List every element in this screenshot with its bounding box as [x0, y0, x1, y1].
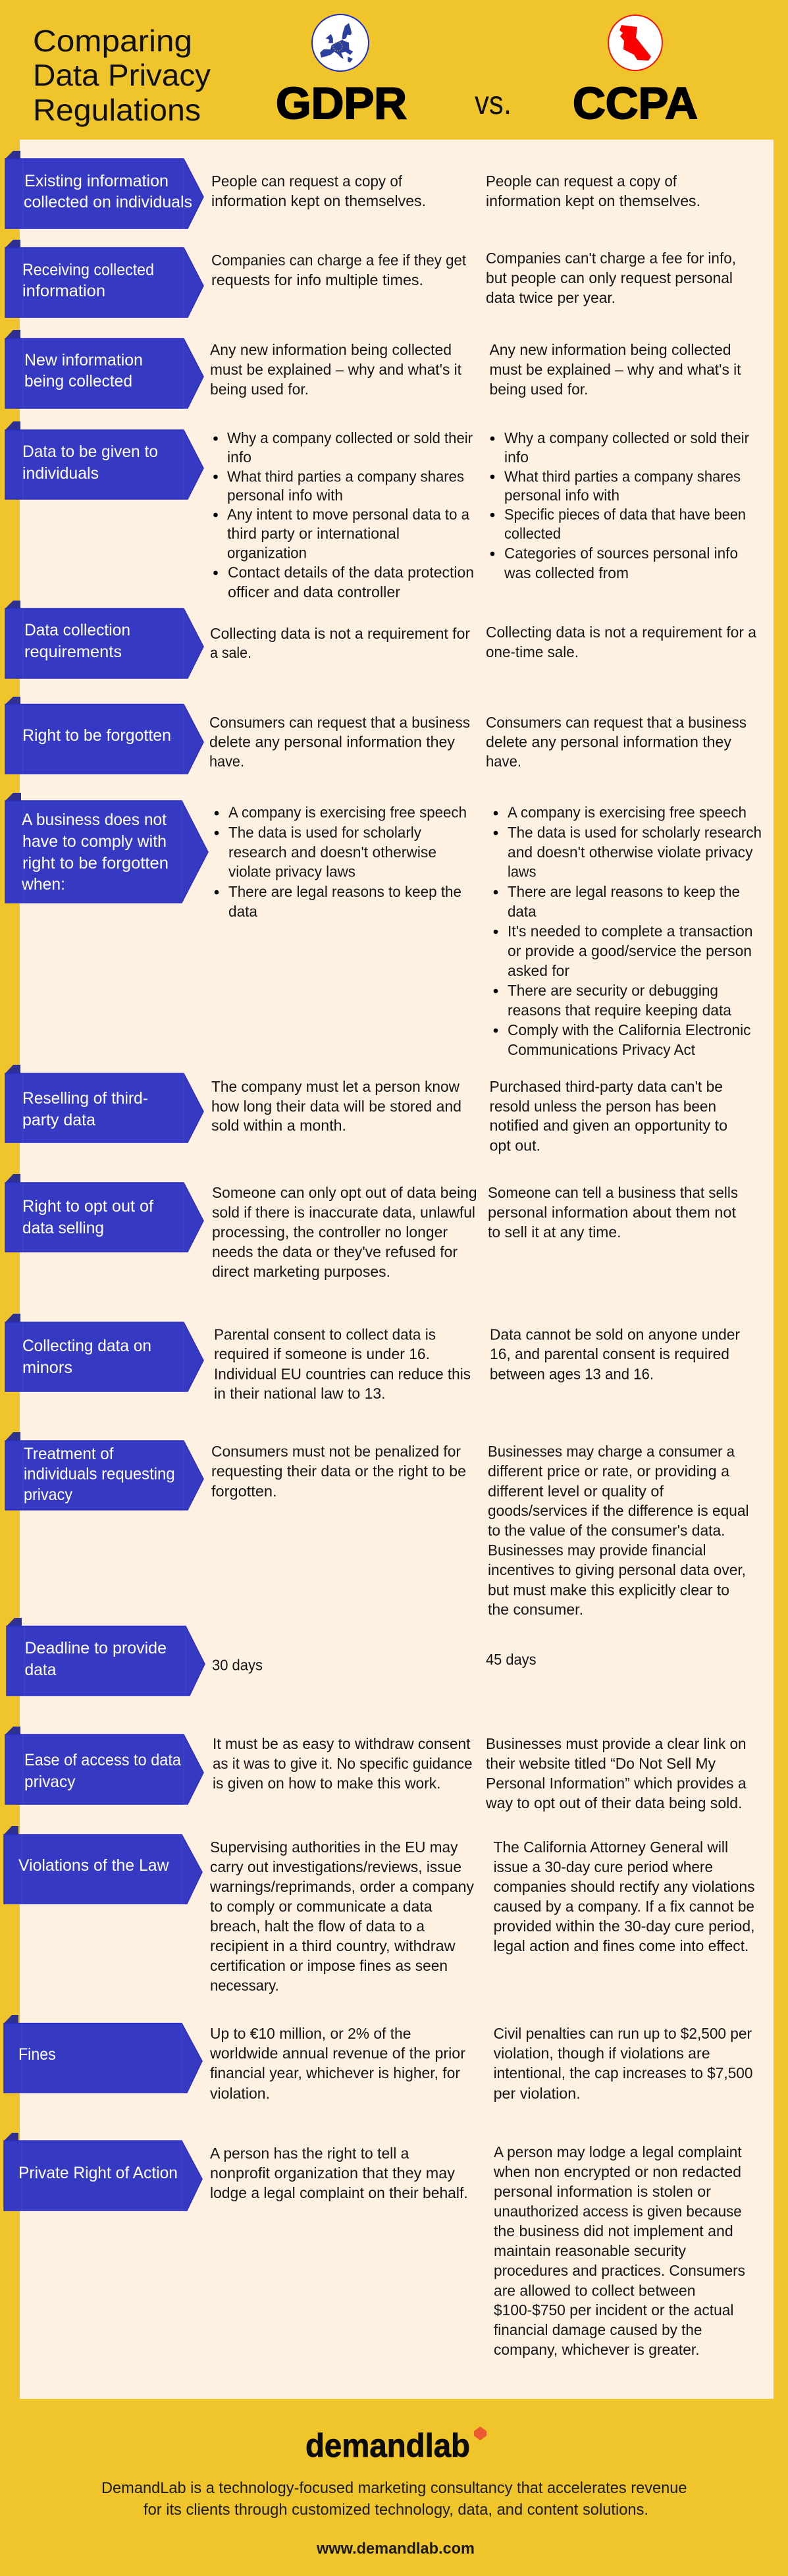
text: CCPA receiving info: but people can only request personal: [486, 269, 733, 286]
text: GDPR violations: recipient in a third country, withdraw: [210, 1937, 456, 1954]
text: GDPR data collection: a sale.: [210, 644, 251, 661]
label: Fines: [4, 2015, 202, 2093]
text: CCPA reselling: notified and given an opportunity to: [490, 1117, 727, 1134]
text: CCPA treatment: to the value of the consumer's data.: [488, 1522, 725, 1539]
label: Collecting data on minors: Collecting data on: [22, 1337, 151, 1355]
text: GDPR violations: to comply or communicate a data: [210, 1898, 433, 1915]
list: CCPA data to be given: info: [504, 448, 529, 466]
text: GDPR new information: being used for.: [210, 381, 309, 398]
label: Right to opt out of data selling: Right to opt out of: [22, 1197, 153, 1216]
text: GDPR violations: warnings/reprimands, order a company: [209, 1878, 474, 1895]
text: GDPR reselling: [211, 1078, 461, 1134]
text: CCPA private right of action: when non encrypted or non redacted: [493, 2163, 741, 2180]
text: GDPR minors: Individual EU countries can reduce this: [214, 1366, 471, 1383]
text: GDPR treatment: forgotten.: [211, 1483, 277, 1500]
label: Treatment of individuals requesting privacy: Treatment of: [24, 1445, 114, 1463]
label: Reselling of third-party data: Reselling of third-: [22, 1089, 148, 1108]
text: GDPR fines: Up to €10 million, or 2% of the: [210, 2025, 411, 2042]
label: Reselling of third-party data: [5, 1065, 203, 1142]
row: Collecting data on minors: [5, 1314, 740, 1402]
list: GDPR exceptions: data: [228, 903, 257, 920]
text: CCPA treatment: Businesses may provide financial: [488, 1542, 706, 1559]
text: vs.: vs.: [475, 84, 512, 121]
row: Exceptions to right to be forgotten: [5, 793, 762, 1058]
text: GDPR fines: financial year, whichever is higher, for: [210, 2064, 460, 2081]
list: CCPA exceptions: The data is used for scholarly research: [508, 824, 762, 841]
text: GDPR violations: Supervising authorities in the EU may: [210, 1838, 458, 1856]
list: GDPR exceptions: The data is used for scholarly: [228, 824, 421, 841]
text: GDPR treatment: [211, 1443, 466, 1500]
text: CCPA violations: legal action and fines come into effect.: [494, 1937, 749, 1954]
title: Data Privacy: [33, 58, 211, 92]
text: GDPR deadline: 30 days: [212, 1657, 263, 1674]
text: CCPA fines: violation, though if violations are: [494, 2045, 710, 2062]
text: CCPA private right of action: financial damage caused by the: [494, 2321, 702, 2338]
text: CCPA right to be forgotten: Consumers can request that a business: [486, 714, 747, 731]
row: Right to opt out of data selling: [5, 1174, 738, 1280]
title: Comparing: [33, 24, 192, 58]
text: CCPA private right of action: procedures and practices. Consumers: [494, 2262, 745, 2279]
label: Right to be forgotten: Right to be forgotten: [22, 726, 171, 745]
text: CCPA receiving info: [486, 250, 736, 306]
label: New information being collected: New information: [24, 351, 143, 369]
label: Deadline to provide data: Deadline to provide: [25, 1639, 167, 1657]
list: GDPR data to be given: What third parties a company shares: [227, 468, 464, 485]
text: CCPA ease of access: their website titled “Do Not Sell My: [486, 1755, 716, 1772]
label: Right to be forgotten: [5, 697, 203, 774]
label: New information being collected: [5, 330, 203, 408]
label: New information being collected: being collected: [24, 372, 132, 390]
text: CCPA minors: between ages 13 and 16.: [490, 1366, 654, 1383]
text: CCPA fines: per violation.: [494, 2085, 581, 2102]
text: CCPA ease of access: Personal Information” which provides a: [486, 1775, 747, 1792]
list: CCPA data to be given: What third parties a company shares: [504, 468, 741, 485]
text: CCPA treatment: Businesses may charge a consumer a: [488, 1443, 735, 1460]
text: GDPR right to be forgotten: Consumers can request that a business: [209, 714, 470, 731]
list: CCPA exceptions: and doesn't otherwise violate privacy: [508, 844, 753, 861]
list: GDPR data to be given: info: [227, 448, 251, 466]
row: Reselling of third-party data: [5, 1065, 727, 1154]
text: GDPR data collection: Collecting data is not a requirement for: [210, 625, 470, 642]
list: CCPA data to be given: Categories of sources personal info: [504, 545, 738, 562]
text: CCPA existing information: [486, 173, 700, 209]
label: Receiving collected information: Receiving collected: [22, 261, 154, 279]
text: CCPA private right of action: $100-$750 per incident or the actual: [494, 2301, 733, 2319]
label: Private Right of Action: [4, 2133, 202, 2211]
text: CCPA private right of action: company, whichever is greater.: [494, 2341, 700, 2358]
row: Violations of the Law: [4, 1826, 755, 1994]
label: Data to be given to individuals: Data to be given to: [22, 443, 158, 461]
text: CCPA private right of action: the business did not implement and: [494, 2222, 733, 2240]
text: GDPR minors: Parental consent to collect data is: [214, 1326, 436, 1343]
text: CCPA violations: [494, 1838, 755, 1954]
label: Private Right of Action: Private Right of Action: [18, 2164, 178, 2182]
text: CCPA opt out: [488, 1184, 738, 1241]
label: A business does not have to comply: right to be forgotten: [22, 854, 169, 872]
label: Receiving collected information: [5, 240, 203, 317]
text: CCPA right to be forgotten: have.: [486, 753, 521, 770]
text: CCPA treatment: goods/services if the difference is equal: [488, 1502, 749, 1519]
text: GDPR reselling: how long their data will be stored and: [211, 1098, 461, 1115]
text: GDPR new information: must be explained – why and what's it: [210, 361, 462, 378]
text: CCPA right to be forgotten: delete any personal information they: [486, 734, 731, 751]
label: Deadline to provide data: [7, 1618, 205, 1696]
list: CCPA data to be given: collected: [504, 525, 561, 542]
text: GDPR right to be forgotten: have.: [209, 753, 244, 770]
label: Deadline to provide data: data: [25, 1661, 57, 1679]
text: GDPR treatment: Consumers must not be penalized for: [211, 1443, 461, 1460]
text: CCPA new information: being used for.: [490, 381, 589, 398]
text: CCPA treatment: different level or quality of: [488, 1483, 664, 1500]
text: GDPR fines: violation.: [210, 2085, 270, 2102]
text: CCPA new information: Any new information being collected: [490, 341, 731, 358]
text: GDPR reselling: The company must let a person know: [211, 1078, 460, 1095]
text: CCPA private right of action: A person may lodge a legal complaint: [494, 2143, 742, 2160]
icon: EU map in circle: [312, 14, 369, 71]
text: CCPA opt out: Someone can tell a business that sells: [488, 1184, 738, 1201]
list: CCPA exceptions: Comply with the California Electronic: [508, 1021, 750, 1038]
text: GDPR fines: [209, 2025, 465, 2102]
text: GDPR minors: [214, 1326, 471, 1402]
list: GDPR data to be given: officer and data controller: [228, 583, 400, 601]
text: CCPA opt out: to sell it at any time.: [488, 1223, 621, 1241]
text: CCPA private right of action: unauthorized access is given because: [494, 2203, 742, 2220]
row: Deadline to provide data: [7, 1618, 536, 1696]
list: GDPR data to be given: Why a company collected or sold their: [227, 429, 473, 446]
label: Existing information: Existing information: [24, 172, 169, 190]
list: CCPA exceptions: data: [508, 903, 537, 920]
text: GDPR minors: in their national law to 13.: [214, 1385, 386, 1402]
text: GDPR existing information: [211, 173, 426, 209]
row: New information being collected: [5, 330, 741, 408]
text: GDPR receiving info: Companies can charge a fee if they get: [211, 252, 467, 269]
text: GDPR violations: carry out investigations/reviews, issue: [210, 1858, 461, 1875]
text: GDPR right to be forgotten: delete any personal information they: [209, 734, 455, 751]
list: CCPA exceptions: laws: [508, 863, 536, 880]
text: CCPA treatment: but must make this explicitly clear to: [488, 1582, 729, 1599]
text: CCPA new information: [490, 341, 741, 398]
text: GDPR receiving info: requests for info multiple times.: [211, 271, 423, 288]
list: GDPR data to be given: Contact details of the data protection: [228, 564, 474, 581]
list: CCPA exceptions: It's needed to complete a transaction: [508, 923, 753, 940]
text: GDPR existing information: People can request a copy of: [211, 173, 403, 190]
label: Treatment of individuals requesting privacy: privacy: [24, 1486, 72, 1504]
label: Violations of the Law: Violations of the Law: [18, 1856, 169, 1875]
text: CCPA private right of action: are allowed to collect between: [494, 2282, 695, 2299]
text: CCPA fines: intentional, the cap increases to $7,500: [494, 2064, 753, 2081]
text: CCPA violations: The California Attorney General will: [494, 1838, 728, 1856]
text: GDPR private right of action: A person has the right to tell a: [210, 2145, 409, 2162]
list: CCPA exceptions: Communications Privacy Act: [508, 1041, 696, 1058]
text: CCPA deadline: 45 days: [486, 1651, 536, 1668]
list: CCPA data to be given: [490, 429, 749, 581]
list: CCPA exceptions: A company is exercising free speech: [508, 804, 747, 821]
text: CCPA new information: must be explained – why and what's it: [490, 361, 741, 378]
text: GDPR new information: Any new information being collected: [210, 341, 452, 358]
label: Data collection requirements: requirements: [24, 643, 122, 661]
text: CCPA existing information: People can request a copy of: [486, 173, 677, 190]
list: GDPR data to be given: personal info with: [227, 487, 343, 504]
text: CCPA right to be forgotten: [486, 714, 747, 770]
text: GDPR treatment: requesting their data or the right to be: [211, 1462, 466, 1480]
list: GDPR exceptions: A company is exercising free speech: [228, 804, 467, 821]
text: GDPR data collection: [210, 625, 470, 661]
text: CCPA treatment: [488, 1443, 749, 1618]
row: Data to be given to individuals: [5, 421, 749, 601]
text: CCPA minors: Data cannot be sold on anyone under: [490, 1326, 740, 1343]
row: Fines: [4, 2015, 753, 2102]
text: CCPA data collection: [486, 624, 756, 660]
text: CCPA minors: [490, 1326, 740, 1383]
text: GDPR ease of access: is given on how to make this work.: [213, 1775, 441, 1792]
text: GDPR opt out: [212, 1184, 477, 1280]
text: CCPA violations: companies should rectify any violations: [494, 1878, 755, 1895]
text: CCPA ease of access: Businesses must provide a clear link on: [486, 1735, 747, 1752]
list: CCPA data to be given: was collected from: [504, 564, 629, 581]
text: CCPA ease of access: [485, 1735, 747, 1811]
list: CCPA data to be given: personal info with: [504, 487, 619, 504]
list: CCPA exceptions: or provide a good/service the person: [508, 942, 752, 959]
list: GDPR data to be given: third party or international: [227, 525, 400, 542]
list: CCPA exceptions: reasons that require keeping data: [508, 1002, 731, 1019]
label: A business does not have to comply: have to comply with: [22, 832, 167, 851]
text: CCPA receiving info: data twice per year.: [486, 289, 616, 306]
text: CCPA violations: provided within the 30-day cure period,: [494, 1918, 755, 1935]
text: GDPR reselling: sold within a month.: [211, 1117, 346, 1134]
text: GDPR opt out: processing, the controller no longer: [212, 1223, 448, 1241]
text: CCPA opt out: personal information about them not: [488, 1204, 737, 1221]
text: CCPA private right of action: personal information is stolen or: [494, 2183, 711, 2200]
label: Treatment of individuals requesting privacy: [5, 1432, 203, 1510]
text: GDPR right to be forgotten: [209, 714, 470, 770]
label: Right to opt out of data selling: data selling: [22, 1219, 104, 1237]
label: Data to be given to individuals: [5, 421, 203, 499]
label: Collecting data on minors: [5, 1314, 203, 1391]
label: Ease of access to data privacy: privacy: [24, 1773, 76, 1791]
heading: CCPA: CCPA: [573, 78, 698, 128]
text: GDPR opt out: sold if there is inaccurate data, unlawful: [212, 1204, 475, 1221]
list: GDPR exceptions: research and doesn't otherwise: [228, 844, 436, 861]
label: Reselling of third-party data: party data: [22, 1111, 95, 1129]
text: GDPR ease of access: It must be as easy to withdraw consent: [213, 1735, 471, 1752]
label: Right to opt out of data selling: [5, 1174, 203, 1252]
text: CCPA data collection: one-time sale.: [486, 643, 579, 660]
list: GDPR data to be given: organization: [227, 544, 307, 561]
text: CCPA treatment: incentives to giving personal data over,: [488, 1561, 746, 1578]
text: CCPA treatment: the consumer.: [488, 1601, 583, 1618]
label: Ease of access to data privacy: [5, 1727, 203, 1804]
label: Ease of access to data privacy: Ease of access to data: [24, 1751, 181, 1769]
label: Collecting data on minors: minors: [22, 1358, 72, 1377]
label: A business does not have to comply: [5, 793, 208, 903]
row: Treatment of individuals requesting privacy: [5, 1432, 749, 1618]
heading: GDPR: GDPR: [276, 78, 407, 128]
text: GDPR fines: worldwide annual revenue of the prior: [209, 2045, 465, 2062]
list: GDPR exceptions: There are legal reasons to keep the: [228, 883, 461, 900]
text: CCPA fines: Civil penalties can run up to $2,500 per: [494, 2025, 752, 2042]
text: CCPA violations: issue a 30-day cure period where: [494, 1858, 713, 1875]
text: CCPA data collection: Collecting data is not a requirement for a: [486, 624, 756, 641]
list: GDPR data to be given: Any intent to move personal data to a: [227, 506, 469, 523]
icon: California map in circle: [608, 15, 662, 70]
label: A business does not have to comply: A business does not: [22, 811, 167, 829]
label: Existing information: [5, 151, 203, 228]
text: GDPR new information: [210, 341, 462, 398]
label: Data to be given to individuals: individuals: [22, 464, 99, 483]
text: GDPR violations: certification or impose fines as seen: [210, 1957, 448, 1974]
text: GDPR private right of action: [210, 2145, 468, 2201]
text: company description: for its clients through customized technology, data, and content solutions.: [144, 2501, 648, 2519]
text: CCPA ease of access: way to opt out of their data being sold.: [485, 1794, 743, 1811]
text: GDPR opt out: Someone can only opt out of data being: [212, 1184, 477, 1201]
text: website: www.demandlab.com: [316, 2540, 475, 2558]
label: Receiving collected information: information: [22, 282, 105, 300]
label: Violations of the Law: [4, 1826, 202, 1904]
row: Private Right of Action: [4, 2133, 745, 2358]
list: CCPA data to be given: Why a company collected or sold their: [504, 429, 749, 446]
text: GDPR ease of access: as it was to give it. No specific guidance: [213, 1755, 473, 1772]
text: GDPR violations: necessary.: [210, 1977, 279, 1994]
text: GDPR violations: breach, halt the flow of data to a: [210, 1918, 425, 1935]
label: Data collection requirements: [5, 601, 203, 678]
text: CCPA private right of action: maintain reasonable security: [494, 2242, 686, 2259]
text: CCPA receiving info: Companies can't charge a fee for info,: [486, 250, 736, 267]
text: CCPA minors: 16, and parental consent is required: [490, 1345, 729, 1362]
list: GDPR exceptions: violate privacy laws: [228, 863, 355, 880]
text: GDPR violations: [209, 1838, 474, 1994]
label: Fines: Fines: [18, 2045, 56, 2064]
text: GDPR receiving info: [211, 252, 467, 288]
list: GDPR exceptions: [215, 804, 467, 920]
title: Regulations: [33, 93, 201, 127]
row: Ease of access to data privacy: [5, 1727, 747, 1811]
text: GDPR existing information: information kept on themselves.: [211, 192, 426, 209]
text: company description: DemandLab is a technology-focused marketing consultancy that accelerates revenue: [101, 2479, 687, 2497]
label: Data collection requirements: Data collection: [24, 621, 130, 639]
text: GDPR minors: required if someone is under 16.: [214, 1345, 430, 1362]
text: CCPA reselling: [490, 1078, 727, 1154]
text: CCPA fines: [494, 2025, 753, 2102]
text: CCPA reselling: Purchased third-party data can't be: [490, 1078, 723, 1095]
text: CCPA treatment: different price or rate, or providing a: [488, 1462, 729, 1480]
text: CCPA private right of action: [493, 2143, 745, 2358]
label: A business does not have to comply: when:: [21, 875, 65, 894]
text: company description: [101, 2479, 687, 2519]
row: Existing information: [5, 151, 700, 228]
logo: demandlab: demandlab: [305, 2427, 470, 2464]
label: Existing information: collected on individuals: [24, 193, 192, 211]
row: Data collection requirements: [5, 601, 756, 678]
title: [33, 24, 211, 127]
text: GDPR ease of access: [213, 1735, 473, 1792]
row: Right to be forgotten: [5, 697, 747, 774]
text: GDPR opt out: needs the data or they've refused for: [212, 1243, 458, 1260]
list: CCPA exceptions: asked for: [508, 962, 569, 979]
list: CCPA data to be given: Specific pieces of data that have been: [504, 506, 746, 523]
list: CCPA exceptions: There are legal reasons to keep the: [508, 883, 740, 900]
text: CCPA violations: caused by a company. If a fix cannot be: [494, 1898, 754, 1915]
list: CCPA exceptions: There are security or debugging: [508, 982, 718, 999]
text: GDPR opt out: direct marketing purposes.: [212, 1263, 390, 1280]
text: CCPA reselling: opt out.: [490, 1137, 540, 1154]
text: CCPA existing information: information kept on themselves.: [486, 192, 700, 209]
list: CCPA exceptions: [494, 804, 762, 1058]
label: Treatment of individuals requesting privacy: individuals requesting: [24, 1464, 175, 1483]
text: GDPR private right of action: nonprofit organization that they may: [210, 2164, 456, 2182]
row: Receiving collected information: [5, 240, 736, 317]
text: CCPA reselling: resold unless the person has been: [490, 1098, 716, 1115]
text: GDPR private right of action: lodge a legal complaint on their behalf.: [210, 2184, 468, 2201]
list: GDPR data to be given: [213, 429, 474, 601]
